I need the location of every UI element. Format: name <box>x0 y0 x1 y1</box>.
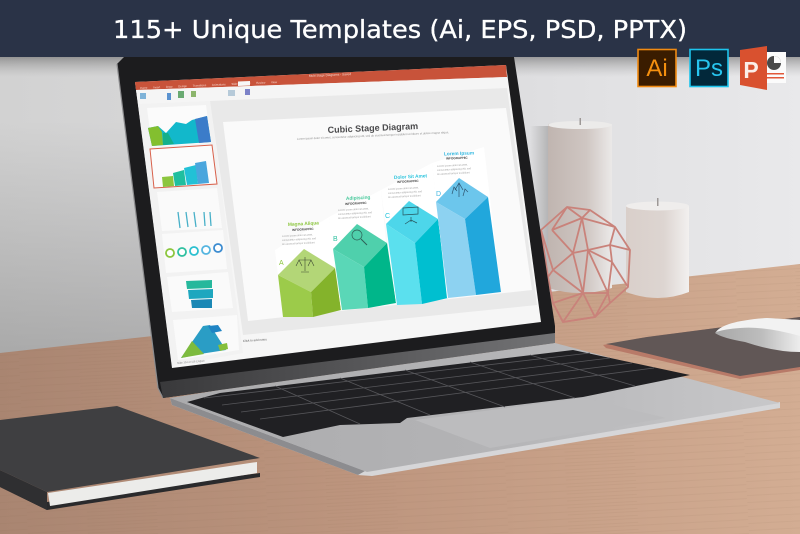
main slide <box>223 108 532 321</box>
ribbon tabs: Home Insert Draw Design Transitions Animations Slide Show Review View <box>140 80 278 90</box>
thumbnail 2 selected <box>150 145 217 188</box>
status bar: Slide 104 of 116 English <box>177 359 205 365</box>
stage C: Dolor Sit Amet <box>394 173 428 181</box>
keyboard <box>187 350 690 437</box>
notes text: Click to add notes <box>243 337 267 343</box>
wooden desk <box>0 264 800 534</box>
thumbnail 3 <box>157 188 222 231</box>
stage A: Magna Aliqua <box>288 220 319 228</box>
stage C: consectetur adipiscing elit, sed <box>388 190 423 195</box>
thumbnail 5 <box>167 272 233 312</box>
banner title: 115+ Unique Templates (Ai, EPS, PSD, PPTX) <box>113 15 687 44</box>
stage C: C <box>385 213 390 220</box>
stage A: do eiusmod tempor incididunt <box>282 241 315 246</box>
slide title: Cubic Stage Diagram <box>327 121 418 135</box>
stage D <box>432 147 501 298</box>
stage B: INFOGRAPHIC <box>345 201 367 206</box>
stage B <box>329 190 396 310</box>
ribbon <box>136 77 509 104</box>
stage D: INFOGRAPHIC <box>446 156 468 160</box>
stage A: INFOGRAPHIC <box>292 227 314 232</box>
stage D: Lorem ipsum dolor sit amet, <box>437 163 468 168</box>
notebook <box>0 406 260 510</box>
stage A <box>275 217 342 317</box>
mouse <box>715 318 800 352</box>
stage C: do eiusmod tempor incididunt <box>388 194 421 199</box>
lid edge highlight <box>117 64 163 398</box>
stage D: consectetur adipiscing elit, sed <box>437 167 472 172</box>
stage B: Adipiscing <box>346 195 371 202</box>
stage A: Lorem ipsum dolor sit amet, <box>282 233 313 238</box>
icon: Illustrator: Ai <box>646 55 668 82</box>
icon: Photoshop <box>690 50 728 86</box>
thumbnail 6 <box>173 315 239 360</box>
laptop lid bezel <box>117 57 555 398</box>
thumbnail 1 <box>147 105 211 147</box>
thumbnail 4 <box>162 230 227 273</box>
candle: short <box>626 198 689 298</box>
copper wire sphere <box>541 207 630 322</box>
laptop <box>117 57 780 476</box>
stage B: consectetur adipiscing elit, sed <box>338 211 373 216</box>
icon: PowerPoint: P <box>743 57 759 83</box>
trackpad <box>415 398 666 448</box>
ribbon icons <box>140 89 250 100</box>
slide subtitle: Lorem ipsum dolor sit amet, consectetur adipiscing elit, sed do eiusmod tempor incididunt ut labore et dolore magna aliqua. <box>297 130 449 141</box>
wall background <box>0 0 800 360</box>
stage A: consectetur adipiscing elit, sed <box>282 237 317 242</box>
laptop base <box>170 343 780 476</box>
slide sidebar <box>138 101 243 366</box>
icon: Photoshop: Ps <box>695 55 723 82</box>
stage D: do eiusmod tempor incididunt <box>437 171 470 176</box>
slide thumbnails <box>147 105 239 360</box>
hinge strip <box>160 333 555 398</box>
active tab <box>238 81 250 86</box>
stage A: A <box>279 260 284 267</box>
stage B: Lorem ipsum dolor sit amet, <box>338 207 369 212</box>
slide work area <box>210 88 537 335</box>
mouse pad <box>603 317 800 379</box>
candle: tall <box>530 118 612 293</box>
stage B: do eiusmod tempor incididunt <box>338 215 371 220</box>
stage B: B <box>333 236 338 243</box>
screen <box>135 65 541 368</box>
stage C: Lorem ipsum dolor sit amet, <box>388 186 419 191</box>
icon: Illustrator <box>638 50 676 86</box>
header banner <box>0 0 800 57</box>
window title: Multi Stage Diagrams - Saved <box>309 72 351 78</box>
stage D: D <box>436 191 441 198</box>
stage C: INFOGRAPHIC <box>397 179 419 184</box>
keys <box>204 353 654 424</box>
stage D: Lorem Ipsum <box>444 150 474 157</box>
stage C <box>381 163 448 305</box>
PowerPoint title bar <box>135 65 507 90</box>
icon: PowerPoint <box>740 46 786 90</box>
